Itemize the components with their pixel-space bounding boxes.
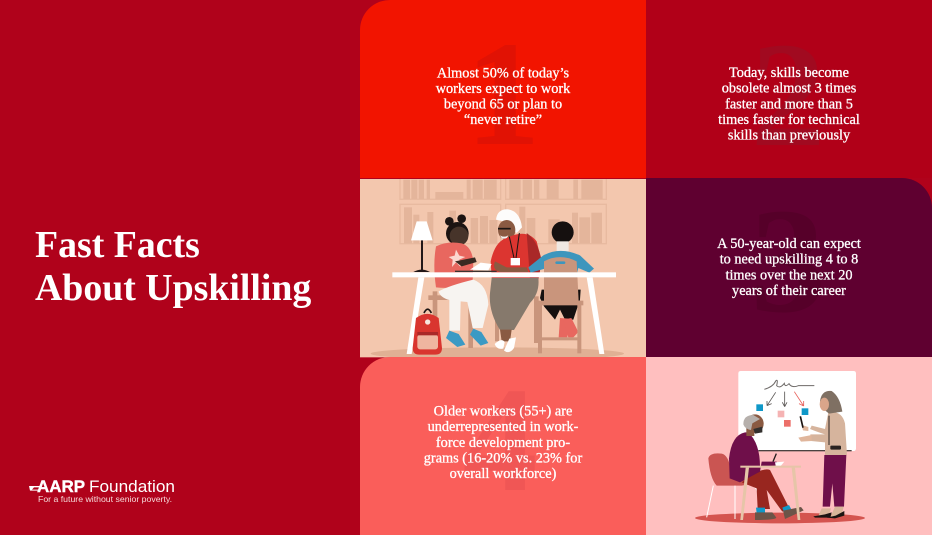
panel: fact 1 xyxy=(360,0,646,178)
panel: fact 4 xyxy=(360,357,646,535)
text: fact 4: grams (16-20% vs. 23% for xyxy=(424,450,582,466)
text: fact 1: Almost 50% of today’s xyxy=(437,66,570,82)
text: fact 3: to need upskilling 4 to 8 xyxy=(720,252,858,268)
panel: fact 3 xyxy=(646,178,932,358)
text: fact 2: faster and more than 5 xyxy=(725,96,853,112)
bookshelves xyxy=(400,179,606,244)
text: fact 2: Today, skills become xyxy=(729,65,849,81)
floor shadow xyxy=(371,347,624,360)
text: fact 1: beyond 65 or plan to xyxy=(444,97,562,113)
numeral 1: 1 xyxy=(466,11,540,177)
text: fact 2: obsolete almost 3 times xyxy=(722,81,857,97)
logo: AARP Foundation: Foundation xyxy=(89,478,175,496)
text: fact 4: underrepresented in work- xyxy=(428,419,579,435)
text: fact 1: “never retire” xyxy=(464,112,542,128)
text: fact 3: A 50-year-old can expect xyxy=(717,236,861,252)
logo: AARP Foundation xyxy=(29,477,175,504)
text: fact 4: force development pro- xyxy=(436,435,570,451)
chair xyxy=(707,453,758,519)
table xyxy=(392,263,616,354)
numeral 2: 2 xyxy=(750,12,826,178)
text: fact 1: workers expect to work xyxy=(436,81,571,97)
text: fact 3: years of their career xyxy=(732,283,846,299)
numeral 3: 3 xyxy=(750,178,826,344)
logo: AARP Foundation: AARP xyxy=(37,477,85,496)
title: About Upskilling xyxy=(35,267,311,309)
panel: library illustration xyxy=(360,179,646,360)
panel: whiteboard illustration xyxy=(646,357,932,535)
desk xyxy=(740,462,801,520)
standing woman xyxy=(798,391,847,518)
text: fact 2: skills than previously xyxy=(728,128,851,144)
seated man xyxy=(729,414,804,520)
whiteboard xyxy=(738,371,856,451)
boy xyxy=(528,221,594,353)
logo: AARP Foundation: For a future without senior poverty. xyxy=(38,494,172,504)
title: Fast Facts xyxy=(35,224,200,266)
numeral 4: 4 xyxy=(462,357,538,523)
lamp xyxy=(411,221,433,272)
text: fact 4: overall workforce) xyxy=(450,466,557,482)
girl xyxy=(428,214,488,350)
teacher xyxy=(490,209,542,352)
text: fact 4: Older workers (55+) are xyxy=(434,404,572,420)
arms on table xyxy=(494,261,528,272)
text: fact 3: times over the next 20 xyxy=(725,267,853,283)
title xyxy=(35,224,311,309)
floor shadow xyxy=(695,513,865,523)
panel: fact 2 xyxy=(646,0,932,178)
backpack xyxy=(413,309,442,355)
text: fact 2: times faster for technical xyxy=(718,112,860,128)
